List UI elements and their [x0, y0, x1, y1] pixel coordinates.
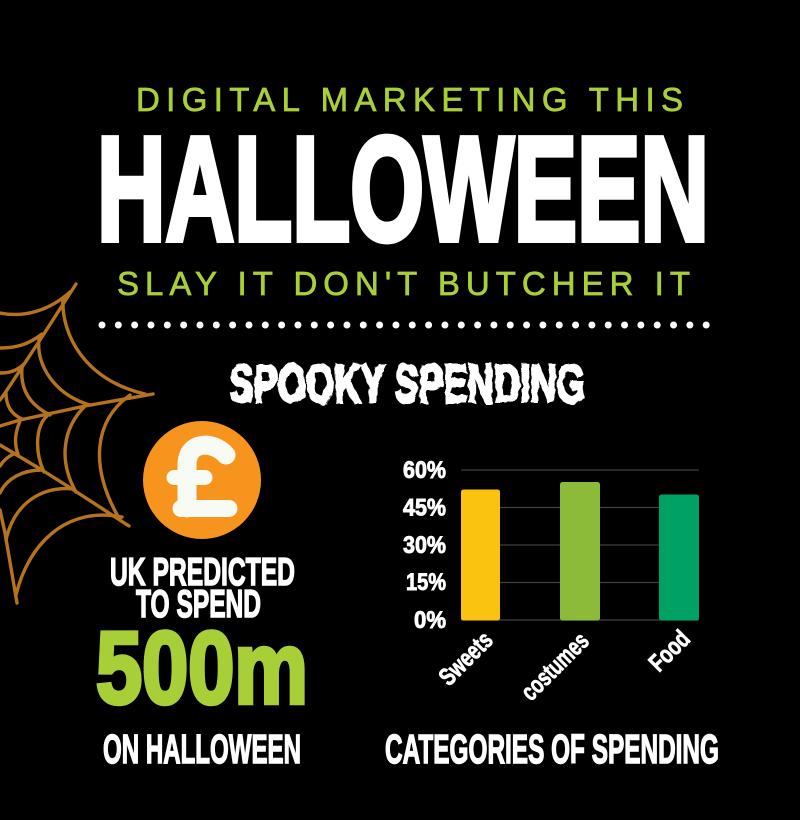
y axis labels: 15% [406, 569, 446, 596]
bar chart: categories of spending [403, 457, 699, 706]
heading: spooky spending: SPOOKY SPENDING [229, 354, 585, 414]
x axis label: costumes: costumes [515, 627, 595, 706]
y axis labels: 45% [403, 494, 446, 522]
y axis labels: 0% [414, 607, 446, 634]
y axis labels: 30% [403, 532, 446, 559]
bar: costumes [560, 482, 600, 620]
bar: sweets [461, 490, 500, 620]
x axis label: sweets: Sweets [433, 626, 498, 691]
x axis label: food: Food [643, 625, 696, 677]
text: uk predicted to spend: UK PREDICTED [110, 551, 295, 594]
icon: spider web [0, 284, 153, 603]
subtitle: slay it don't butcher it: SLAY IT DON'T BUTCHER IT [117, 265, 690, 302]
figure: 500m: 500m [96, 611, 308, 725]
icon: pound coin [143, 421, 261, 539]
text: uk predicted to spend [110, 551, 295, 626]
title: digital marketing this: DIGITAL MARKETING THIS [136, 81, 683, 118]
dotted divider [102, 322, 707, 328]
text: uk predicted to spend: TO SPEND [136, 583, 261, 626]
y axis labels [403, 457, 446, 634]
y axis labels: 60% [403, 457, 446, 484]
bar: food [659, 494, 699, 620]
text: on halloween: ON HALLOWEEN [103, 726, 301, 772]
